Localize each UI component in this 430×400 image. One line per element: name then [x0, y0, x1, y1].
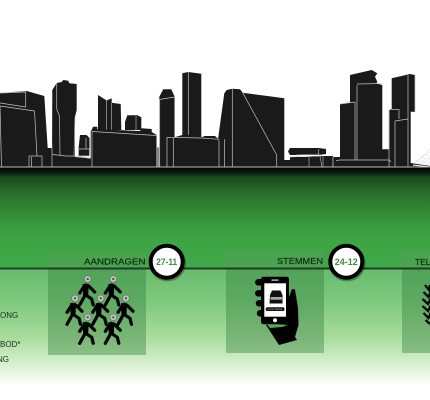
background: green gradient upper band — [0, 167, 430, 268]
vote online label: VOTE ONLINE — [268, 309, 283, 311]
icon: group of walking voters — [67, 276, 133, 343]
bridge cables — [413, 149, 430, 167]
panel: aandragen — [48, 253, 146, 355]
panel: stemmen — [226, 251, 324, 353]
skyline of Rotterdam — [0, 70, 430, 167]
milestone badge: 27-11: 27-11 — [156, 257, 178, 268]
text fragment: ong: ONG — [0, 311, 18, 320]
icon: laurel wreath — [422, 285, 430, 324]
milestone badge: 24-12: 24-12 — [335, 257, 358, 268]
skyline ground line — [0, 166, 430, 168]
heading: stemmen: STEMMEN — [277, 256, 323, 266]
text fragment: bod: BOD* — [0, 340, 20, 349]
milestone badge: 27-11 — [149, 244, 186, 282]
cropped left text block — [0, 311, 20, 364]
milestone badge: 24-12 — [328, 244, 366, 282]
panel: tellen — [402, 251, 430, 353]
heading: aandragen: AANDRAGEN — [84, 256, 146, 266]
background: green gradient lower band — [0, 268, 430, 386]
timeline line — [0, 268, 430, 270]
